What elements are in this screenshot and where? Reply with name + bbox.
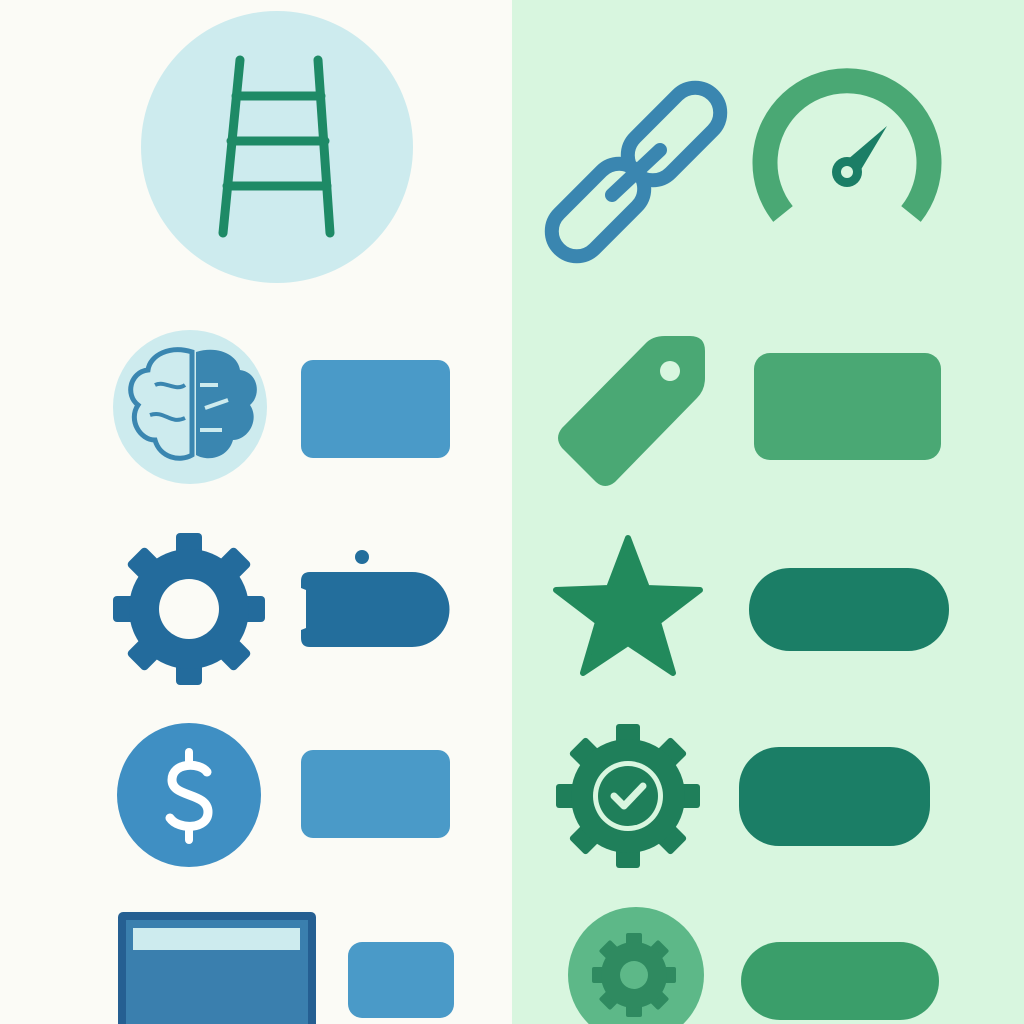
icon: gauge [765, 81, 929, 214]
bar: green pill 4 [741, 942, 939, 1020]
bar: blue 1 [301, 360, 450, 458]
bar: green pill 2 [749, 568, 949, 651]
icon: price tag [558, 336, 705, 486]
icon: dollar circle [117, 723, 261, 867]
icon: browser window [118, 912, 316, 1024]
icon: gear with check [556, 724, 700, 868]
icon: gear in green circle [568, 907, 704, 1024]
bar: green 1 [754, 353, 941, 460]
bar: green pill 3 [739, 747, 930, 846]
icon: ladder in circle [141, 11, 413, 283]
bar: blue 3 [301, 750, 450, 838]
icon: gear blue [113, 533, 265, 685]
icon: star [556, 538, 700, 673]
icon: chain link [541, 77, 731, 267]
bar: blue 4 [348, 942, 454, 1018]
icon: brain in circle [113, 330, 267, 484]
bar: blue pill with dot [301, 550, 450, 647]
